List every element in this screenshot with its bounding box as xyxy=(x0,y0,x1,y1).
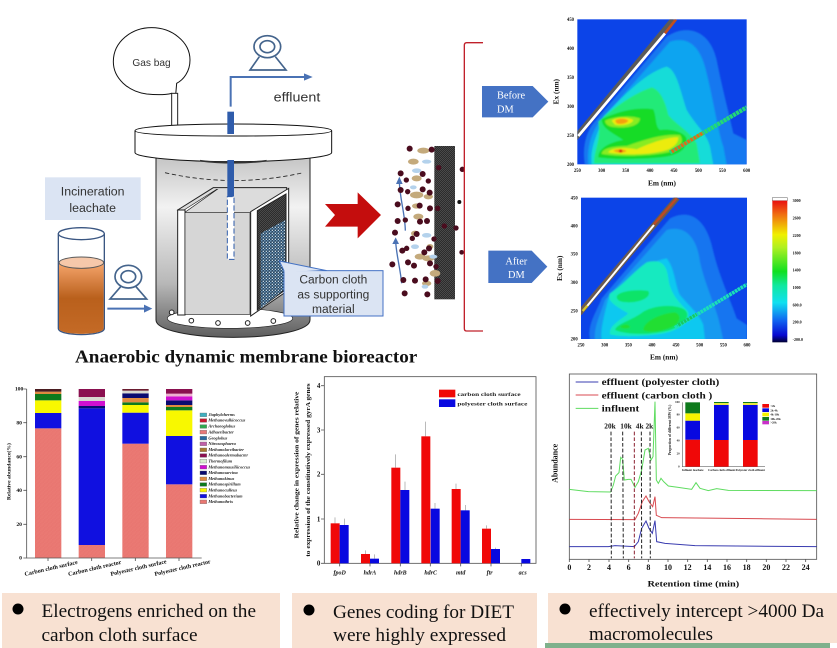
axis labels: acs xyxy=(519,570,527,576)
label: incineration leachate: leachate xyxy=(69,201,116,215)
axis labels: after: 300 xyxy=(571,281,578,286)
frame xyxy=(569,374,817,562)
label: effluent: effluent xyxy=(274,90,321,104)
axis labels: before: 250 xyxy=(567,134,575,139)
icon: gas bag: Gas bag xyxy=(132,58,171,69)
axis labels: 40 xyxy=(16,488,22,494)
molecular weight markers xyxy=(604,422,654,558)
axis labels: Relative abundance(%) xyxy=(6,443,13,500)
legend: Jiaphyloherms xyxy=(207,412,235,417)
inset stacked bars: 4k-10k xyxy=(770,413,779,417)
colour scale: 1800 xyxy=(793,250,801,255)
panel: electrogens conclusion: carbon cloth surface xyxy=(42,625,198,646)
axis labels: before: 600 xyxy=(743,169,751,174)
contour plot: before xyxy=(575,19,747,165)
inset stacked bars: Proportion of different MW (%) xyxy=(668,404,672,455)
callout: carbon cloth: as supporting xyxy=(297,288,369,302)
label: after DM: DM xyxy=(508,270,525,281)
axis labels: Carbon cloth surface xyxy=(24,560,79,578)
axis labels: before: 350 xyxy=(567,76,575,81)
legend: Methanoculleus xyxy=(207,487,238,492)
arrow: effluent flow xyxy=(231,73,313,107)
axis labels: after: Ex (nm) xyxy=(555,255,564,281)
axis labels: after: 400 xyxy=(571,224,578,229)
chromatogram: molecular weight distribution xyxy=(550,374,817,588)
legend: carbon cloth surface xyxy=(457,392,521,398)
axis labels: 80 xyxy=(16,420,22,426)
pipe: outlet tube xyxy=(227,112,234,259)
axis labels: after xyxy=(555,196,751,362)
reactor vessel xyxy=(156,157,310,337)
label: before DM xyxy=(482,86,548,117)
axis labels: 2 xyxy=(317,471,321,479)
axis labels: 4 xyxy=(317,382,321,390)
axis labels: 4 xyxy=(607,563,611,572)
trace: influent xyxy=(569,402,817,492)
axis labels: fpoD xyxy=(334,570,346,576)
axis labels: 10 xyxy=(664,563,672,572)
inset stacked bars: <2k xyxy=(770,404,776,408)
axis labels: hdrA xyxy=(364,570,376,576)
axis labels: Abundance xyxy=(550,443,559,483)
stacked bar chart: relative abundance xyxy=(6,387,250,578)
bullet xyxy=(560,604,570,614)
legend: Methanokinus xyxy=(207,476,235,481)
axis labels: before: 300 xyxy=(567,105,575,110)
legend: Geoglobus xyxy=(208,435,228,440)
axis labels: 24 xyxy=(802,563,810,572)
inset stacked bars: Influent leachate xyxy=(682,468,704,472)
axis labels: Polyester cloth surface xyxy=(110,559,168,578)
icon: gas bag xyxy=(113,28,190,130)
axis labels xyxy=(550,443,810,588)
axis labels: before: Em (nm) xyxy=(648,178,676,187)
legend: Archaeoglobus xyxy=(207,424,236,429)
axis labels xyxy=(6,387,212,578)
bar chart: gene expression xyxy=(294,377,536,576)
axis labels: before xyxy=(552,18,751,187)
axis labels: Carbon cloth reactor xyxy=(68,560,122,578)
axis labels: 1 xyxy=(317,515,321,523)
axis labels: Retention time (min) xyxy=(647,579,739,588)
label: after DM: After xyxy=(505,256,528,267)
legend: Methanolacvibacter xyxy=(207,447,244,452)
plot frame xyxy=(321,377,536,566)
axis labels: 14 xyxy=(703,563,711,572)
axis labels: before: 450 xyxy=(671,169,678,174)
callout: carbon cloth xyxy=(279,261,383,316)
axis labels: 12 xyxy=(684,563,692,572)
inset stacked bars: 80 xyxy=(677,413,680,417)
inset stacked bars: 0 xyxy=(678,464,680,468)
callout: carbon cloth: Carbon cloth xyxy=(299,273,367,287)
axis labels: 6 xyxy=(627,563,631,572)
panel: genes conclusion: were highly expressed xyxy=(333,625,507,646)
colour scale: 3000 xyxy=(793,198,801,203)
axis labels: before: 300 xyxy=(598,169,606,174)
axis labels: before: 500 xyxy=(695,169,702,174)
axis labels: 0 xyxy=(567,563,571,572)
axis labels: after: Em (nm) xyxy=(650,353,678,362)
axis labels: before: 450 xyxy=(567,18,575,23)
legend: Methanosarcina xyxy=(207,470,239,475)
axis labels: after: 600 xyxy=(744,344,751,349)
axis labels: to expression of the constitutively expressed gyrA genes xyxy=(305,383,312,557)
inset stacked bars: 40 xyxy=(677,439,680,443)
axis labels: before: 200 xyxy=(567,163,575,168)
icon: effluent pump xyxy=(250,36,286,70)
legend xyxy=(439,390,528,407)
inset stacked bars: 20 xyxy=(677,451,680,455)
label: after DM xyxy=(488,251,547,283)
label: before DM: Before xyxy=(497,91,526,102)
axis labels: 18 xyxy=(743,563,751,572)
legend: Methanoalermabacter xyxy=(207,453,248,458)
bullet xyxy=(304,604,314,616)
panel: electrogens conclusion: Electrogens enriched on the xyxy=(42,601,256,622)
colour scale: 600.0 xyxy=(793,302,802,307)
axis labels: 100 xyxy=(15,387,24,393)
reactor schematic xyxy=(45,28,483,367)
axis labels: after: 550 xyxy=(720,344,727,349)
bullet xyxy=(12,604,24,614)
legend: Nitrososphaera xyxy=(207,441,237,446)
trace: carbon cloth effluent xyxy=(569,496,817,520)
trace: polyester cloth effluent xyxy=(569,521,817,547)
colour scale: 200.0 xyxy=(793,320,802,325)
inset stacked bars: 10k-20k xyxy=(770,417,781,421)
molecular weight markers: 4k xyxy=(636,422,644,431)
legend: Methanobacterium xyxy=(207,493,243,498)
axis labels: after: 250 xyxy=(571,309,578,314)
inset stacked bars: Carbon cloth effluent xyxy=(708,468,735,472)
arrow: red block arrow xyxy=(325,192,381,238)
molecular weight markers: 20k xyxy=(604,422,617,431)
membrane module xyxy=(178,188,289,316)
inset stacked bars: 100 xyxy=(675,400,680,404)
axis labels: after: 450 xyxy=(673,344,680,349)
inset stacked bars: Polyester cloth effluent xyxy=(736,468,765,472)
axis labels: 3 xyxy=(317,426,321,434)
legend xyxy=(200,412,250,504)
legend: Methanospirillum xyxy=(207,482,241,487)
axes xyxy=(23,389,202,561)
legend: Methanothrix xyxy=(207,499,234,504)
EEM after DM xyxy=(488,196,803,362)
axis labels: hdrC xyxy=(424,570,438,576)
inset stacked bars: 60 xyxy=(677,426,680,430)
error bars xyxy=(335,422,496,559)
axis labels: hdrB xyxy=(394,570,407,576)
inset stacked bars: >20k xyxy=(770,421,777,425)
colour scale: 2600 xyxy=(793,216,801,221)
axis labels: 0 xyxy=(19,556,22,562)
molecular weight markers: 2k xyxy=(645,422,654,431)
panel: electrogens conclusion xyxy=(2,593,280,648)
axis labels: 0 xyxy=(317,560,321,568)
axis labels: 20 xyxy=(762,563,770,572)
axis labels: before: 400 xyxy=(647,169,654,174)
axis labels: mtd xyxy=(456,570,466,576)
title: Anaerobic dynamic membrane bioreactor xyxy=(75,347,417,367)
EEM before DM xyxy=(482,18,751,187)
arrow: influent flow xyxy=(107,305,152,313)
legend: Methanomassiliicoccus xyxy=(207,464,250,469)
axis labels: after: 350 xyxy=(571,253,578,258)
axis labels: 8 xyxy=(646,563,650,572)
bars xyxy=(35,389,192,558)
axis labels: before: 550 xyxy=(719,169,726,174)
colour scale: 1400 xyxy=(793,268,801,273)
legend: Methanovulkicoccus xyxy=(207,418,246,423)
legend: effluent (carbon cloth ) xyxy=(602,390,712,401)
legend: Adhaeribacter xyxy=(207,429,234,434)
axis labels: after: 450 xyxy=(571,196,578,201)
axis labels: 22 xyxy=(782,563,790,572)
leachate tank xyxy=(58,228,104,335)
icon: influent pump xyxy=(110,265,147,299)
legend: Thermofilum xyxy=(208,458,233,463)
label: incineration leachate: Incineration xyxy=(61,185,125,199)
axis labels: after: 200 xyxy=(571,338,578,343)
panel: genes conclusion xyxy=(292,593,537,648)
colour scale: 1000 xyxy=(793,285,801,290)
legend xyxy=(576,377,719,414)
axis labels: after: 400 xyxy=(649,344,656,349)
axis labels: after: 250 xyxy=(578,344,585,349)
legend: polyester cloth surface xyxy=(457,401,528,407)
molecular weight markers: 10k xyxy=(620,422,633,431)
axis labels: after: 300 xyxy=(601,344,609,349)
axis labels: before: 350 xyxy=(622,169,630,174)
panel: interception conclusion xyxy=(545,593,837,648)
colour scale: -200.0 xyxy=(793,337,803,342)
axis labels: 16 xyxy=(723,563,731,572)
axis labels: 2 xyxy=(587,563,591,572)
dynamic membrane illustration xyxy=(389,146,465,299)
callout: carbon cloth: material xyxy=(312,302,355,316)
colour scale: 2200 xyxy=(793,233,801,238)
inset stacked bars: 2k-4k xyxy=(770,408,778,412)
axis labels: 60 xyxy=(16,454,22,460)
axis labels: ftr xyxy=(487,570,493,576)
axis labels: before: Ex (nm) xyxy=(552,78,561,104)
legend: influent xyxy=(602,403,640,414)
axis labels: before: 250 xyxy=(574,169,581,174)
axis labels: before: 400 xyxy=(567,47,575,52)
axis labels: after: 500 xyxy=(696,344,704,349)
label: before DM: DM xyxy=(497,105,514,116)
axis labels: Polyester cloth reactor xyxy=(154,559,212,578)
bars xyxy=(331,436,530,563)
axis labels: 20 xyxy=(16,522,22,528)
contour plot: after xyxy=(579,198,747,340)
legend: effluent (polyester cloth) xyxy=(602,377,719,388)
panel: interception conclusion: macromolecules xyxy=(589,624,713,645)
panel: genes conclusion: Genes coding for DIET xyxy=(333,602,514,623)
axis labels: after: 350 xyxy=(625,344,632,349)
reactor lid xyxy=(135,124,332,163)
axis labels: Relative change in expression of genes relative xyxy=(294,392,301,538)
colour scale xyxy=(772,198,803,342)
bracket xyxy=(464,43,483,331)
axis labels xyxy=(294,382,527,576)
label: incineration leachate xyxy=(45,177,141,220)
panel: interception conclusion: effectively intercept >4000 Da xyxy=(589,601,825,622)
inset stacked bars xyxy=(668,400,781,472)
